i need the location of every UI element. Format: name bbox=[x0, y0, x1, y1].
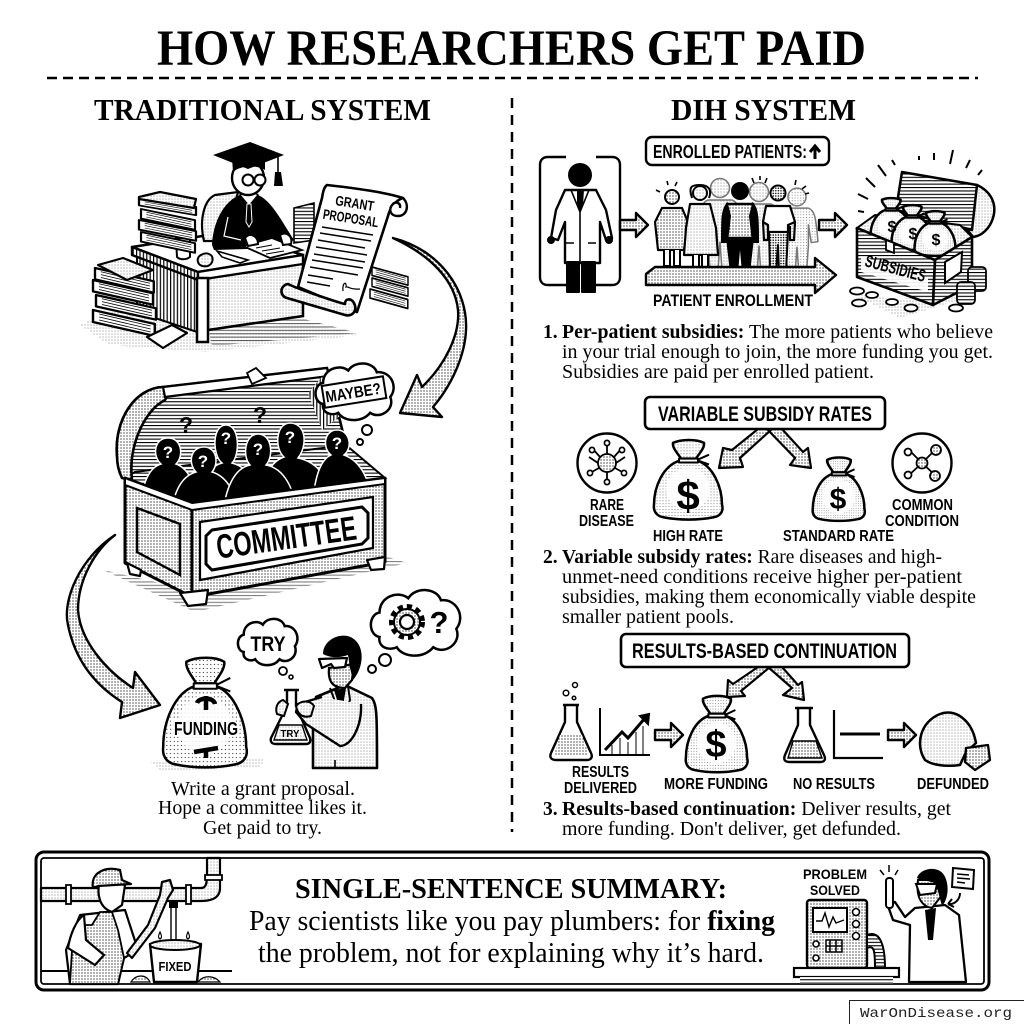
text block: per-patient subsidies: Subsidies are paid per enrolled patient. bbox=[562, 362, 874, 383]
question marks: ? bbox=[163, 443, 173, 462]
label: results delivered bbox=[564, 764, 637, 797]
label: common condition bbox=[885, 497, 959, 530]
icon: more funding bag bbox=[686, 696, 748, 772]
icon: common condition bbox=[892, 434, 952, 492]
illustration: grant proposal scroll bbox=[281, 185, 407, 315]
text block: results-based continuation bbox=[543, 799, 952, 840]
title: HOW RESEARCHERS GET PAID bbox=[157, 21, 866, 77]
text block: per-patient subsidies: in your trial enough to join, the more funding you get. bbox=[562, 342, 993, 363]
callout: try bbox=[238, 619, 297, 679]
illustration: academic at desk with books bbox=[80, 142, 408, 352]
question marks: ? bbox=[253, 440, 263, 459]
label: problem solved bbox=[803, 866, 867, 898]
illustration: plumber fixing pipe bbox=[41, 858, 232, 984]
summary text: Pay scientists like you pay plumbers: for fixing bbox=[249, 906, 775, 937]
question marks: ? bbox=[332, 434, 342, 453]
text block: variable subsidy rates: unmet-need conditions receive higher per-patient bbox=[562, 567, 963, 588]
committee silhouettes bbox=[140, 423, 376, 525]
badge: enrolled patients: ENROLLED PATIENTS: bbox=[653, 142, 807, 162]
question marks: ? bbox=[179, 412, 193, 438]
text block: variable subsidy rates: Variable subsidy rates: Rare diseases and high- bbox=[562, 547, 942, 568]
illustration: subsidies chest: $ bbox=[932, 232, 941, 249]
summary text bbox=[249, 906, 775, 969]
illustration: patient group bbox=[655, 176, 818, 274]
icon: standard rate bag: $ bbox=[830, 483, 847, 516]
flask label: TRY bbox=[280, 729, 300, 740]
icon: more funding bag: $ bbox=[705, 724, 727, 766]
arrow: no results to defunded bbox=[888, 723, 916, 747]
caption: traditional system: Write a grant proposal. bbox=[171, 778, 355, 800]
label: common condition: COMMON bbox=[892, 497, 953, 514]
illustration: committee chest bbox=[103, 368, 407, 612]
icon: standard rate bag bbox=[813, 458, 865, 521]
question marks: ? bbox=[198, 452, 208, 471]
badge: variable subsidy rates bbox=[645, 397, 885, 468]
label: rare disease: DISEASE bbox=[579, 513, 634, 530]
label: more funding: MORE FUNDING bbox=[664, 776, 768, 793]
icon: deflated bag bbox=[920, 712, 990, 770]
icon: high rate bag bbox=[654, 440, 723, 520]
label: problem solved: SOLVED bbox=[810, 882, 860, 898]
badge: results-based continuation: RESULTS-BASED CONTINUATION bbox=[632, 640, 897, 663]
badge: variable subsidy rates: VARIABLE SUBSIDY RATES bbox=[658, 403, 872, 426]
callout: gear and question: ? bbox=[430, 605, 448, 640]
illustration: subsidies chest: $ bbox=[888, 219, 897, 236]
label: defunded: DEFUNDED bbox=[917, 776, 989, 793]
text block: results-based continuation: Results-based continuation: Deliver results, get bbox=[562, 799, 952, 820]
icon: flask with flat chart bbox=[784, 708, 883, 762]
text block: per-patient subsidies: 1. bbox=[543, 322, 558, 343]
panel: DIH system bbox=[540, 92, 994, 840]
scroll label: GRANT bbox=[334, 192, 376, 214]
question marks bbox=[163, 402, 342, 471]
caption: traditional system: Get paid to try. bbox=[203, 817, 322, 839]
label: rare disease: RARE bbox=[590, 497, 624, 514]
label: patient enrollment: PATIENT ENROLLMENT bbox=[653, 291, 814, 310]
icon: funding bag bbox=[150, 658, 265, 770]
text block: results-based continuation: 3. bbox=[543, 799, 558, 820]
callout: maybe: MAYBE? bbox=[324, 381, 382, 406]
panel: traditional system bbox=[67, 92, 466, 839]
question marks: ? bbox=[285, 428, 295, 447]
question marks: ? bbox=[253, 402, 267, 428]
text block: variable subsidy rates bbox=[543, 547, 976, 628]
bucket label: FIXED bbox=[158, 959, 192, 974]
text block: per-patient subsidies: Per-patient subsidies: The more patients who believe bbox=[562, 322, 993, 343]
badge: enrolled patients bbox=[646, 137, 829, 165]
label: problem solved: PROBLEM bbox=[803, 866, 867, 882]
label: high rate: HIGH RATE bbox=[653, 528, 723, 545]
watermark: WarOnDisease.org bbox=[860, 1006, 1012, 1022]
arrow: results to funding bbox=[655, 723, 683, 747]
label: common condition: CONDITION bbox=[885, 513, 959, 530]
icon: flask with rising chart bbox=[550, 682, 650, 760]
text block: per-patient subsidies bbox=[543, 322, 993, 383]
icon: rare disease bbox=[578, 434, 636, 492]
arrow: patient enrollment bbox=[646, 258, 836, 293]
illustration: subsidies chest: $ bbox=[909, 226, 918, 243]
callout: gear and question bbox=[368, 590, 460, 673]
summary heading: SINGLE-SENTENCE SUMMARY: bbox=[295, 874, 727, 905]
callout: maybe bbox=[316, 363, 394, 445]
text block: variable subsidy rates: smaller patient pools. bbox=[562, 607, 734, 628]
label: standard rate: STANDARD RATE bbox=[783, 528, 894, 545]
label: results delivered: RESULTS bbox=[572, 764, 629, 781]
question marks: ? bbox=[221, 429, 231, 448]
arrow: committee to funding bbox=[67, 535, 160, 718]
illustration: scientist with flask bbox=[271, 636, 377, 768]
label: no results: NO RESULTS bbox=[793, 776, 875, 793]
summary text: the problem, not for explaining why it’s hard. bbox=[258, 938, 764, 969]
label: results delivered: DELIVERED bbox=[564, 780, 637, 797]
panel: single-sentence summary bbox=[36, 852, 989, 990]
illustration: grant proposal scroll: PROPOSAL bbox=[322, 206, 380, 230]
caption: traditional system bbox=[158, 778, 367, 839]
badge: results-based continuation bbox=[621, 634, 909, 700]
chest label: SUBSIDIES bbox=[863, 251, 928, 286]
illustration: subsidies chest bbox=[850, 150, 994, 318]
label: rare disease bbox=[579, 497, 634, 530]
icon: high rate bag: $ bbox=[676, 472, 700, 519]
icon: funding bag: FUNDING bbox=[174, 719, 238, 739]
text block: variable subsidy rates: 2. bbox=[543, 547, 558, 568]
illustration: doctor in frame bbox=[540, 157, 620, 292]
caption: traditional system: Hope a committee likes it. bbox=[158, 797, 367, 819]
heading: traditional system: TRADITIONAL SYSTEM bbox=[94, 92, 431, 127]
arrow: proposal to committee bbox=[393, 238, 466, 417]
text block: variable subsidy rates: subsidies, making them economically viable despite bbox=[562, 587, 976, 608]
chest label: COMMITTEE bbox=[214, 509, 359, 567]
callout: try: TRY bbox=[250, 633, 286, 656]
heading: DIH system: DIH SYSTEM bbox=[671, 92, 856, 127]
illustration: scientist with machine, problem solved bbox=[794, 865, 974, 984]
arrow: patients to chest bbox=[819, 213, 847, 237]
arrow: doctor to patients bbox=[620, 213, 648, 237]
watermark bbox=[850, 1000, 1024, 1024]
text block: results-based continuation: more funding. Don't deliver, get defunded. bbox=[562, 819, 901, 840]
